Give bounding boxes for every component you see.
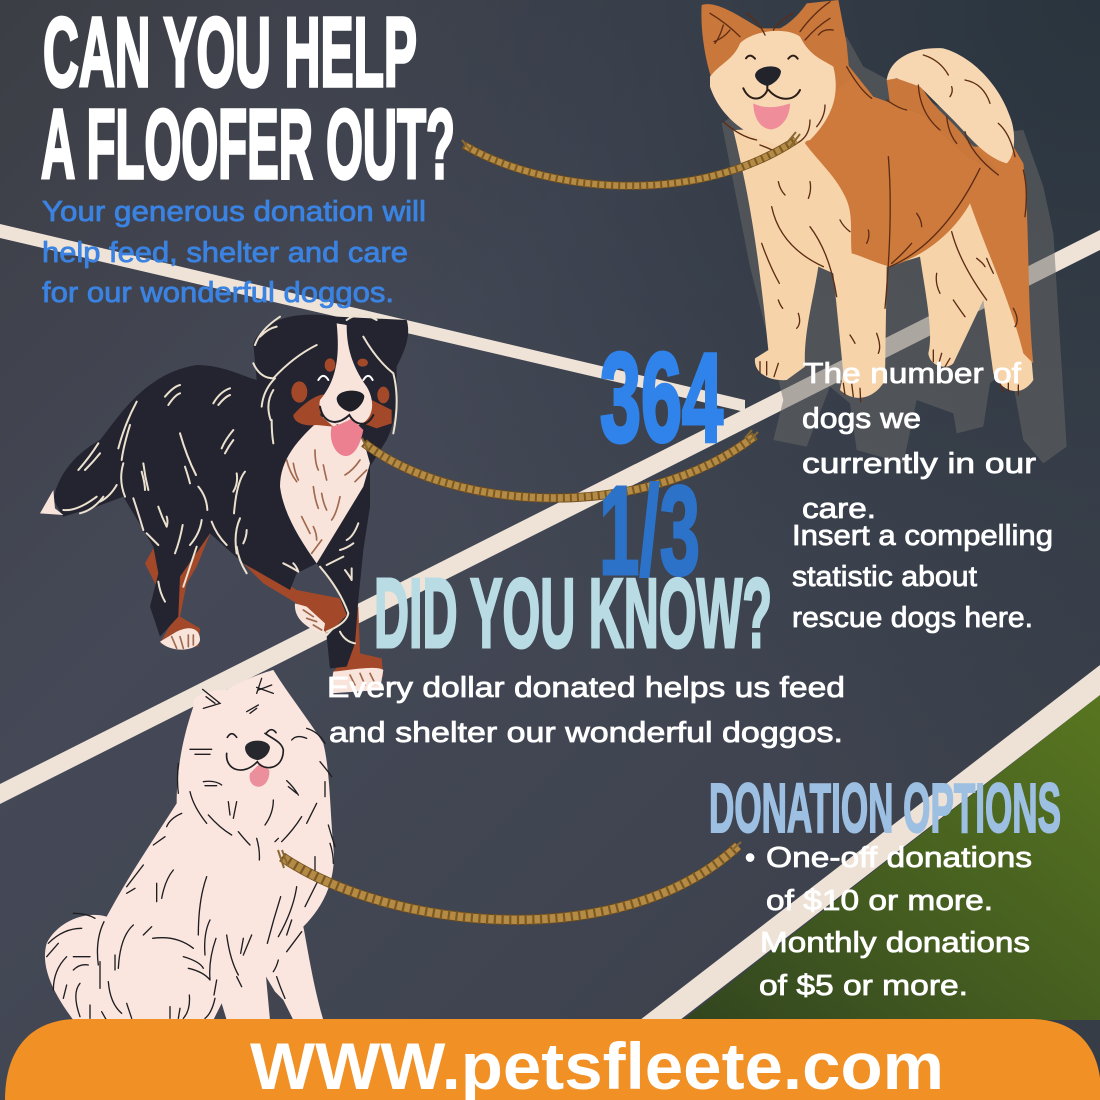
akita cream body and legs — [733, 127, 1033, 398]
akita orange coat — [805, 63, 1033, 363]
bernese chest and paw marks — [172, 450, 375, 685]
bernese white markings — [40, 490, 383, 693]
akita fur lines — [710, 2, 1026, 402]
text block: every dollar — [327, 672, 845, 749]
dog: bernese, middle left — [40, 315, 408, 693]
bernese black body — [53, 315, 408, 668]
stat: 364: 364 — [600, 327, 723, 468]
title: CAN YOU HELP — [43, 0, 417, 107]
intro text: help feed, shelter and care — [42, 237, 408, 269]
stat caption: number of dogs: currently in our — [802, 448, 1036, 480]
samoyed white body — [45, 670, 334, 1020]
stat caption: number of dogs — [802, 358, 1036, 525]
list: donation options: of $5 or more. — [759, 970, 968, 1002]
akita tail — [887, 48, 1014, 173]
stat caption: number of dogs: dogs we — [802, 403, 921, 435]
stat caption: compelling statistic: rescue dogs here. — [792, 602, 1033, 634]
list: donation options: Monthly donations — [760, 927, 1030, 959]
list: donation options: of $10 or more. — [766, 885, 993, 917]
samoyed face — [227, 730, 283, 787]
infographic canvas: A FLOOFER OUT? — [41, 89, 455, 199]
list: donation options: One-off donations — [766, 842, 1032, 874]
stat: 1/3: 1/3 — [599, 460, 700, 601]
stat caption: compelling statistic: statistic about — [792, 561, 977, 593]
rope: bottom leash — [278, 842, 741, 920]
intro text — [42, 196, 426, 309]
bernese face — [291, 323, 392, 456]
rope: middle leash — [362, 430, 758, 498]
bernese brown markings — [145, 530, 383, 677]
intro text: for our wonderful doggos. — [42, 277, 394, 309]
dog: samoyed, bottom left — [45, 670, 335, 1020]
stat caption: number of dogs: care. — [802, 493, 876, 525]
akita faded shadow — [722, 37, 1067, 463]
stat caption: number of dogs: The number of — [803, 358, 1022, 390]
stat caption: compelling statistic — [792, 520, 1053, 634]
samoyed gap between legs — [213, 977, 293, 1020]
dog: akita, top right — [701, 0, 1067, 463]
text block: every dollar: and shelter our wonderful doggos. — [329, 717, 843, 749]
list: donation options: • — [745, 842, 755, 874]
bernese fur lines — [63, 315, 397, 643]
samoyed fur lines — [47, 678, 335, 1019]
list: donation options — [745, 842, 1032, 1002]
text block: every dollar: Every dollar donated helps us feed — [327, 672, 845, 704]
stat caption: compelling statistic: Insert a compelling — [792, 520, 1053, 552]
title — [41, 0, 455, 199]
footer banner — [5, 1019, 1100, 1100]
bernese chest — [280, 417, 370, 563]
intro text: Your generous donation will — [42, 196, 426, 228]
rope: top leash — [462, 132, 800, 186]
akita head — [701, 0, 850, 147]
